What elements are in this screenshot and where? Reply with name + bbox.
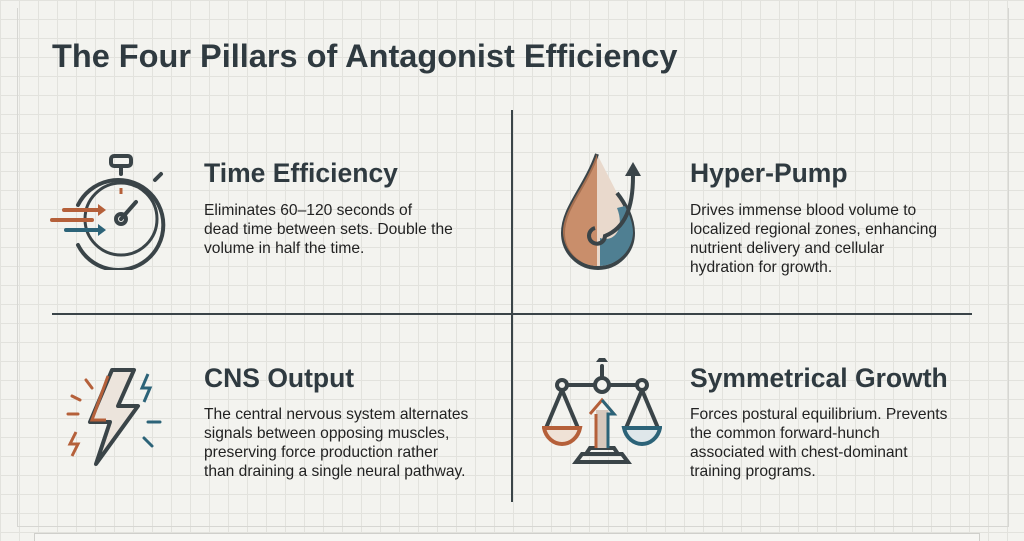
text: time efficiency: volume in half the time. <box>204 240 364 257</box>
heading: cns output: CNS Output <box>204 363 354 393</box>
heading: symmetrical growth: Symmetrical Growth <box>690 363 948 393</box>
text: symmetrical growth: Forces postural equilibrium. Prevents <box>690 406 947 423</box>
text: symmetrical growth: associated with chest-dominant <box>690 444 908 461</box>
text: hyper-pump: Drives immense blood volume to <box>690 202 916 219</box>
icon: lightning <box>66 368 162 466</box>
heading: hyper-pump: Hyper-Pump <box>690 158 848 188</box>
text: hyper-pump: hydration for growth. <box>690 259 832 276</box>
text: cns output: signals between opposing muscles, <box>204 425 449 442</box>
text: symmetrical growth <box>690 406 947 480</box>
text: cns output: preserving force production rather <box>204 444 438 461</box>
icon: stopwatch <box>50 154 166 270</box>
text: cns output: than draining a single neural pathway. <box>204 463 466 480</box>
text: cns output <box>204 406 468 480</box>
icon: balance scale <box>542 358 662 464</box>
heading: time efficiency: Time Efficiency <box>204 158 398 188</box>
text: hyper-pump <box>690 202 937 276</box>
icon: blood drop <box>561 153 641 270</box>
text: cns output: The central nervous system alternates <box>204 406 468 423</box>
text: symmetrical growth: the common forward-hunch <box>690 425 880 442</box>
text: hyper-pump: nutrient delivery and cellular <box>690 240 884 257</box>
text: symmetrical growth: training programs. <box>690 463 816 480</box>
text: time efficiency <box>204 202 453 257</box>
title: The Four Pillars of Antagonist Efficiency <box>52 38 677 74</box>
text: time efficiency: dead time between sets. Double the <box>204 221 453 238</box>
text: hyper-pump: localized regional zones, enhancing <box>690 221 937 238</box>
text: time efficiency: Eliminates 60–120 seconds of <box>204 202 412 219</box>
